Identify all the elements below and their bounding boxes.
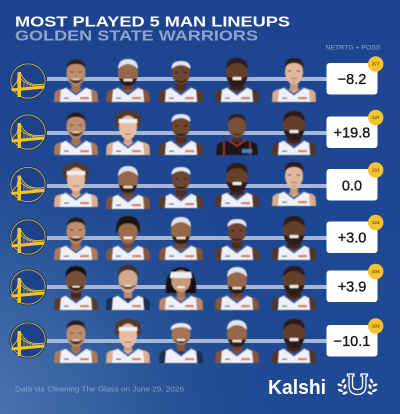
players — [54, 265, 316, 310]
net rating value: +19.8 — [334, 126, 370, 142]
players — [54, 318, 316, 363]
lineup row 5 — [10, 264, 383, 310]
net rating value: 0.0 — [342, 178, 362, 194]
possessions badge — [368, 215, 383, 230]
lineup row 2 — [10, 110, 383, 155]
lineup row 6 — [10, 318, 383, 363]
possessions badge: 103 — [372, 324, 380, 329]
possessions badge: 131 — [372, 168, 380, 173]
players — [54, 110, 316, 155]
data source note: Data via Cleaning The Glass on June 29, 2026 — [15, 384, 184, 394]
lineup row 3 — [10, 162, 383, 209]
net rating box — [326, 222, 378, 253]
team logo — [10, 269, 46, 305]
net rating box — [326, 270, 378, 302]
team logo — [10, 114, 46, 150]
net rating value: −10.1 — [334, 334, 370, 350]
team logo — [10, 63, 46, 99]
possessions badge: 277 — [372, 62, 380, 67]
Kalshi wordmark: Kalshi — [268, 377, 326, 399]
team logo — [10, 322, 46, 358]
players — [54, 58, 316, 102]
possessions badge — [368, 264, 383, 279]
possessions badge — [368, 162, 383, 178]
icon: U laurel logo — [337, 374, 378, 395]
net rating value: +3.0 — [338, 230, 366, 246]
net rating box — [326, 63, 378, 94]
team logo — [10, 219, 46, 255]
net rating box — [326, 325, 378, 356]
possessions badge — [368, 318, 383, 334]
possessions badge — [368, 110, 383, 125]
team logo — [10, 166, 46, 202]
subtitle: GOLDEN STATE WARRIORS — [15, 28, 258, 44]
lineup row 4 — [10, 215, 383, 260]
possessions badge: 124 — [372, 220, 380, 225]
possessions badge — [368, 56, 383, 72]
net rating box — [326, 169, 378, 200]
possessions badge: 104 — [372, 269, 380, 274]
possessions badge: 137 — [372, 115, 380, 120]
title: MOST PLAYED 5 MAN LINEUPS — [15, 14, 290, 30]
players — [54, 216, 316, 260]
net rating value: +3.9 — [338, 280, 366, 296]
players — [54, 162, 316, 209]
lineup row 1 — [10, 56, 383, 102]
net rating value: −8.2 — [338, 72, 366, 88]
net rating box — [326, 116, 378, 148]
column header: NETRTG + POSS — [326, 44, 381, 52]
